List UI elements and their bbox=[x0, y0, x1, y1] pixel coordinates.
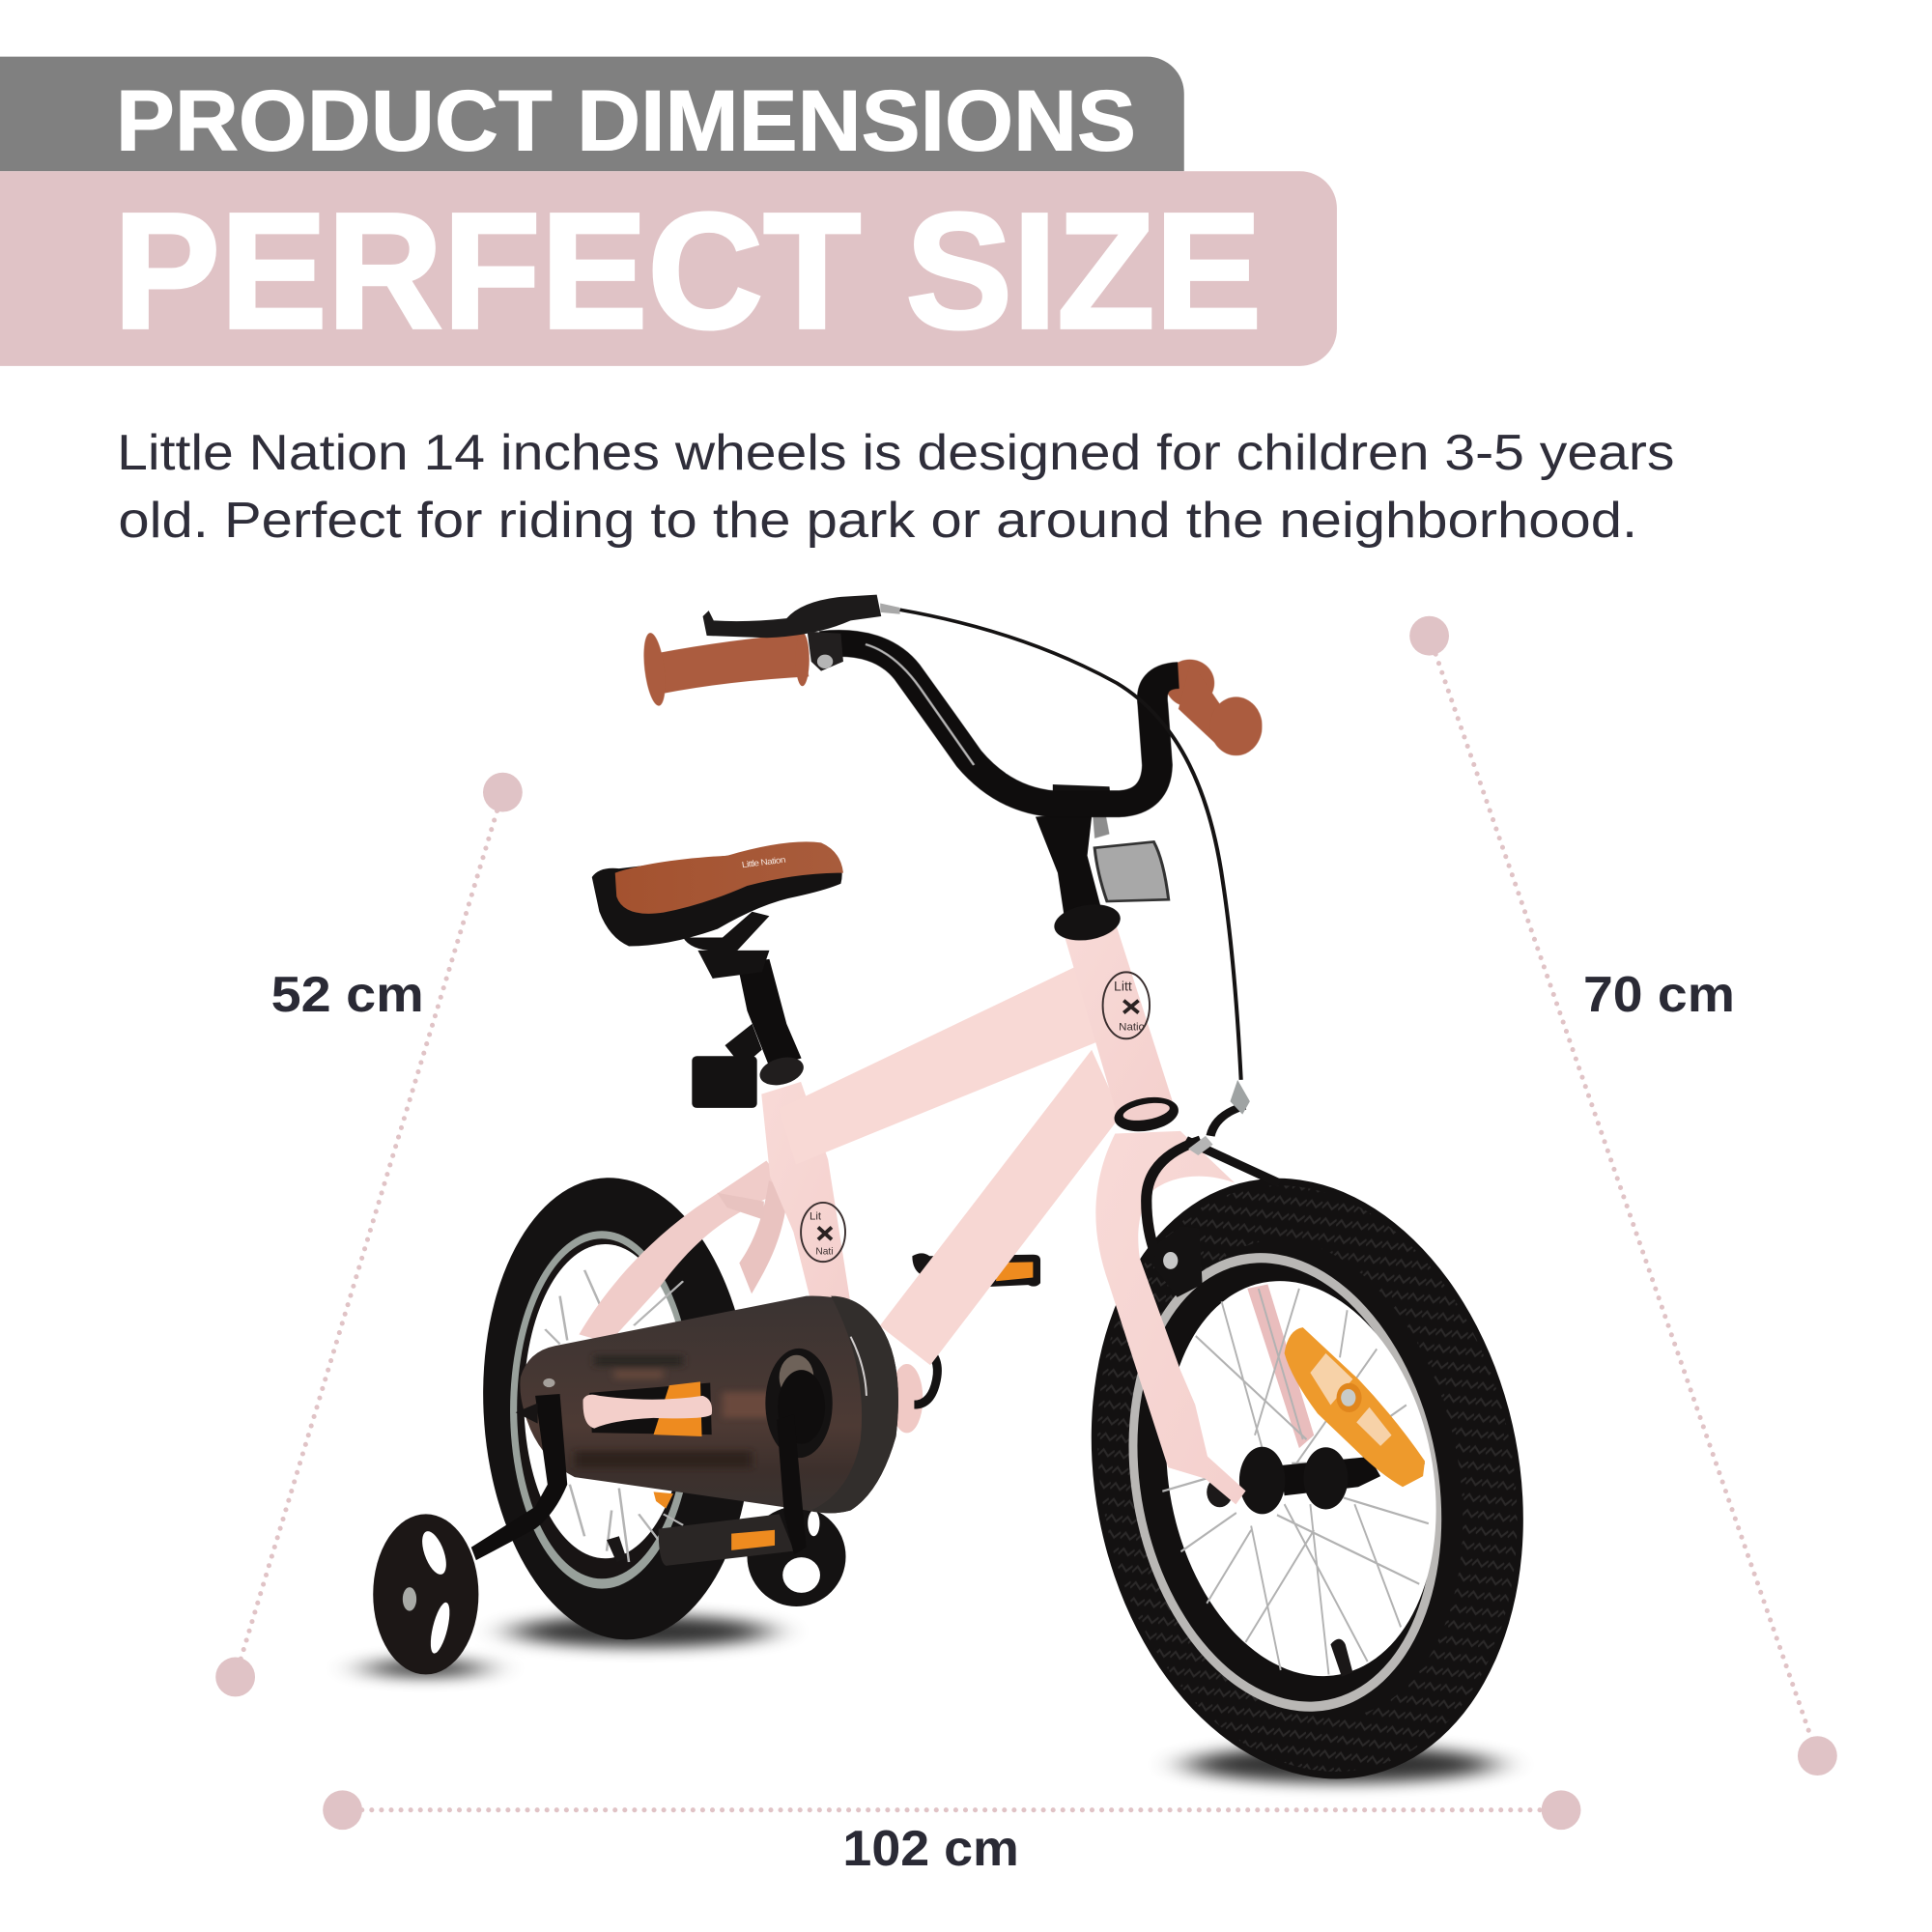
logo stamp on seat tube: Lit bbox=[810, 1211, 822, 1223]
brake cable bbox=[900, 610, 1241, 1080]
hub bbox=[1207, 1447, 1380, 1514]
header band: perfect size: PERFECT SIZE bbox=[113, 179, 1262, 363]
front reflector bbox=[1094, 841, 1169, 901]
logo stamp on head tube: Litt bbox=[1114, 979, 1132, 994]
left grip bbox=[640, 632, 810, 707]
saddle base bbox=[592, 845, 842, 946]
bottom bracket bbox=[891, 1364, 923, 1433]
stabilizer rear disc bbox=[747, 1507, 846, 1606]
description text bbox=[117, 425, 1674, 549]
dimension: seat height 52 cm: 52 cm bbox=[271, 967, 424, 1023]
seatpost bbox=[683, 912, 808, 1108]
description text: old. Perfect for riding to the park or around the neighborhood. bbox=[118, 493, 1637, 549]
top tube bbox=[779, 967, 1099, 1164]
guard slot with reflector bbox=[582, 1381, 712, 1436]
wheel reflector bbox=[1285, 1327, 1425, 1487]
dimension: height 70 cm bbox=[1409, 616, 1837, 1776]
down tube bbox=[880, 1050, 1122, 1365]
handlebar, grips and cable bbox=[640, 595, 1263, 1080]
front wheel bbox=[1041, 1141, 1574, 1816]
logo stamp on seat tube bbox=[801, 1203, 845, 1262]
dimension: length 102 cm: 102 cm bbox=[842, 1821, 1019, 1877]
right grip bbox=[1165, 660, 1263, 755]
logo stamp on seat tube: Nati bbox=[815, 1246, 834, 1257]
brake arms bbox=[1147, 1080, 1279, 1256]
crank arm behind bracket bbox=[914, 1346, 937, 1405]
stabilizer wheel and arm bbox=[373, 1378, 567, 1674]
illustration: kids bike bbox=[363, 595, 1574, 1816]
frame bbox=[579, 922, 1173, 1433]
valve bbox=[1330, 1639, 1352, 1677]
brake bracket bbox=[1144, 1226, 1203, 1297]
dimension: height 70 cm: 70 cm bbox=[1583, 967, 1735, 1023]
saddle and seatpost bbox=[592, 841, 843, 1108]
bar bbox=[821, 643, 1179, 804]
far fork leg and spokes bbox=[1144, 1226, 1429, 1677]
dimension: seat height 52 cm bbox=[215, 773, 523, 1696]
brake lever bbox=[703, 595, 900, 671]
fork bbox=[1095, 1131, 1246, 1504]
dimension: length 102 cm bbox=[323, 1790, 1580, 1877]
far pedal bbox=[912, 1253, 1040, 1287]
logo stamp on head tube bbox=[1103, 972, 1150, 1038]
description text: Little Nation 14 inches wheels is designed for children 3-5 years bbox=[117, 425, 1674, 481]
seat tube bbox=[761, 1082, 850, 1301]
chain guard bbox=[520, 1295, 898, 1513]
stem bbox=[1036, 784, 1124, 946]
seat stays bbox=[579, 1161, 788, 1343]
saddle top bbox=[615, 841, 843, 914]
saddle brand: Little Nation bbox=[741, 855, 786, 870]
chainring window bbox=[765, 1349, 833, 1458]
pedal and crank bbox=[659, 1414, 807, 1566]
head tube collar bbox=[1111, 1093, 1182, 1136]
rear wheel bbox=[472, 1175, 762, 1643]
header band: product dimensions: PRODUCT DIMENSIONS bbox=[116, 72, 1136, 169]
ground shadows bbox=[363, 1615, 1494, 1783]
logo stamp on head tube: Natio bbox=[1119, 1021, 1145, 1033]
head tube bbox=[1065, 922, 1173, 1122]
